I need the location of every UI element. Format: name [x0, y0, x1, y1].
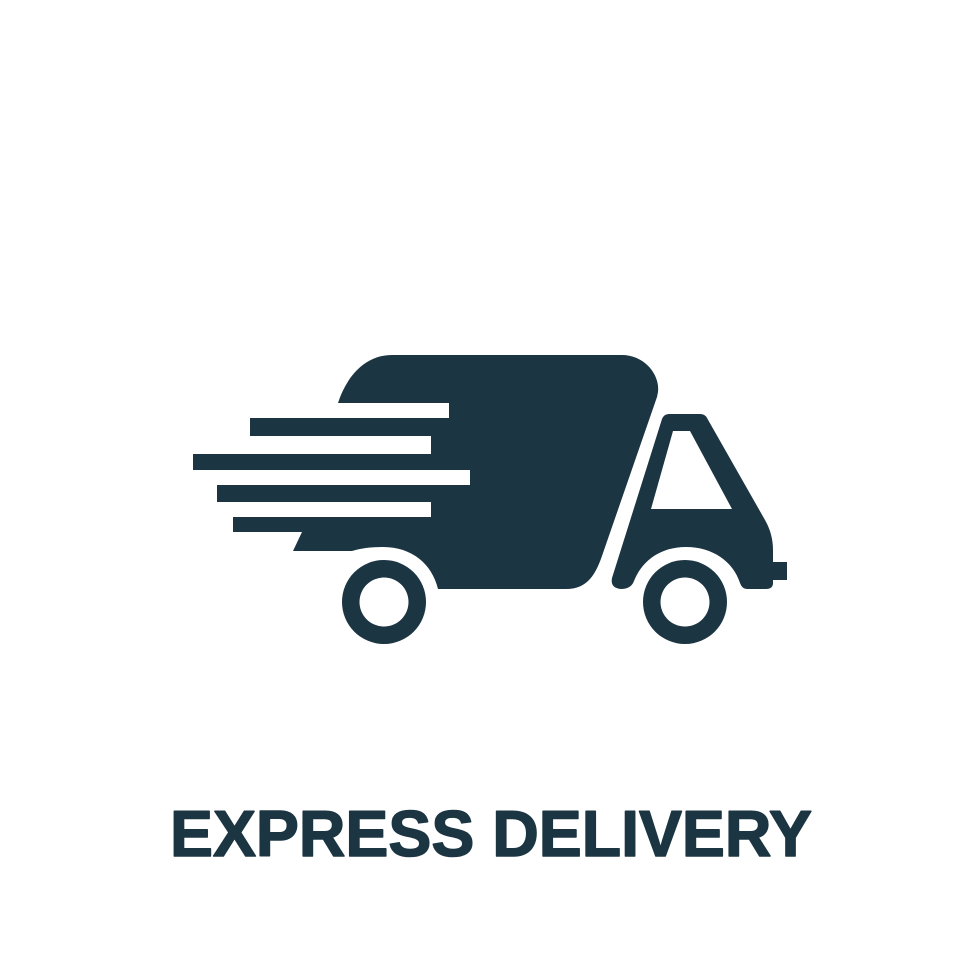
- rear wheel: [342, 560, 426, 644]
- title: EXPRESS DELIVERY: [170, 797, 812, 870]
- icon: express delivery truck: [193, 355, 787, 644]
- truck cargo body with speed lines: [193, 355, 658, 589]
- truck cab with window: [612, 414, 787, 589]
- front wheel: [643, 560, 727, 644]
